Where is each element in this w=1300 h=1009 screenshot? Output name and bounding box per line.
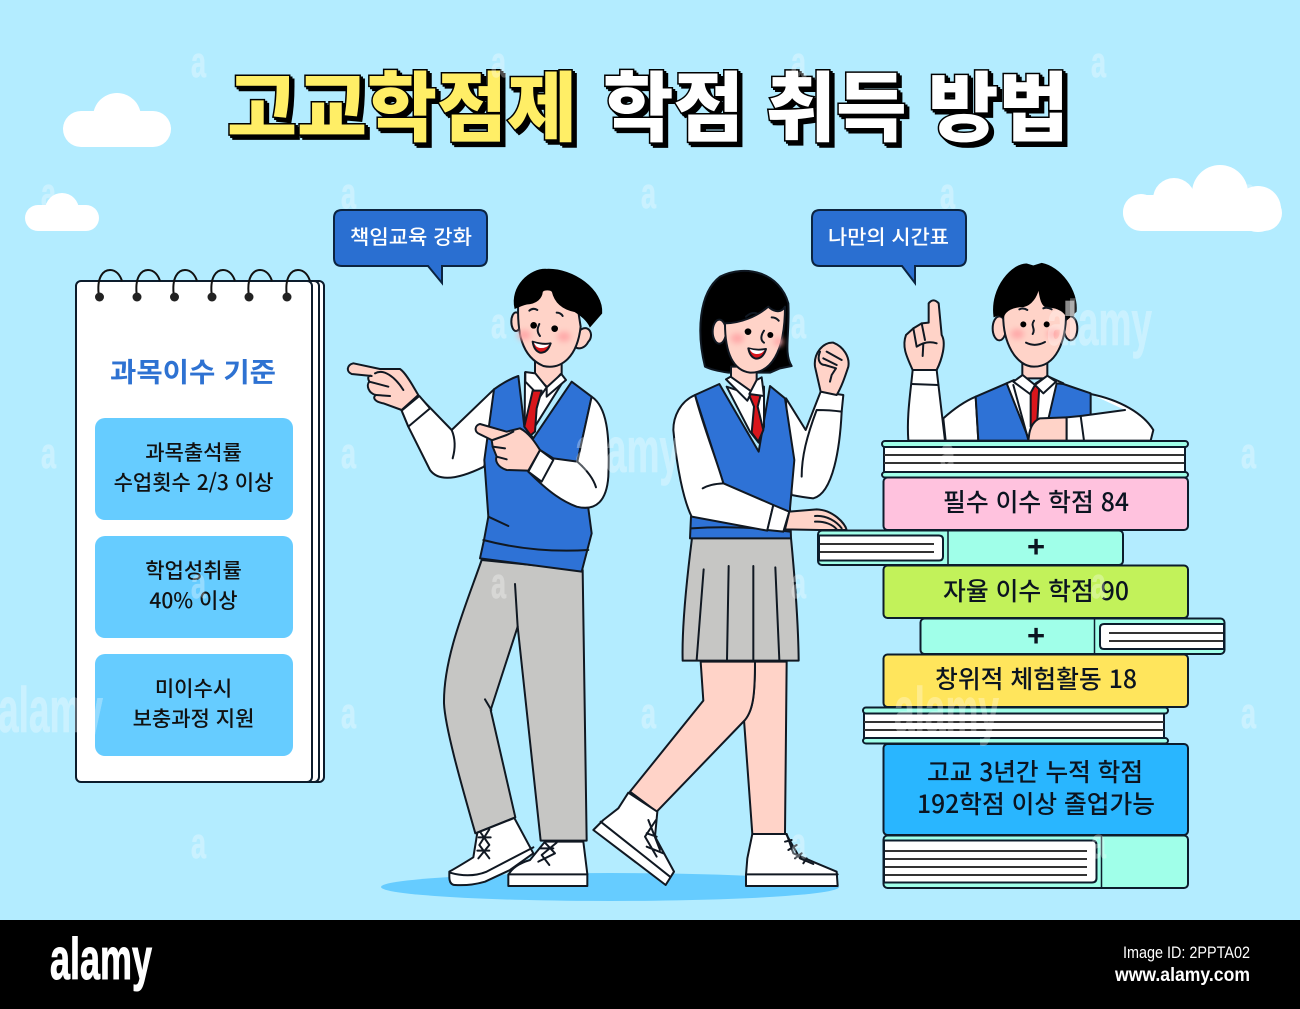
watermarks: a: [940, 429, 955, 478]
criteria box 1: 과목출석률: [145, 437, 242, 467]
criteria box 1: 수업횟수 2/3 이상: [114, 467, 273, 497]
watermarks: a: [491, 819, 506, 868]
girl legs and skirt: [593, 538, 838, 886]
watermarks: a: [41, 429, 56, 478]
watermarks: a: [641, 689, 656, 738]
watermarks: a: [491, 299, 506, 348]
footer logo: alamy: [50, 927, 152, 992]
title remainder: 학점 취득 방법: [603, 47, 1069, 157]
watermarks: a: [341, 169, 356, 218]
cloud: small left: [25, 193, 99, 231]
watermarks: a: [491, 559, 506, 608]
book: required credits: 필수 이수 학점 84: [943, 483, 1129, 519]
watermarks: a: [341, 689, 356, 738]
watermarks: a: [641, 169, 656, 218]
cloud: right: [1123, 165, 1282, 232]
watermarks: a: [191, 819, 206, 868]
ground shadow: [381, 873, 839, 901]
book: creative activities: 창위적 체험활동 18: [935, 660, 1137, 696]
panel: notebook: [76, 270, 324, 782]
watermarks: alamy: [894, 674, 999, 746]
watermarks: a: [791, 819, 806, 868]
character: girl: [593, 271, 849, 886]
book: graduation requirement: 192학점 이상 졸업가능: [917, 785, 1155, 821]
notebook heading: 과목이수 기준: [110, 351, 276, 390]
watermarks: a: [1241, 169, 1256, 218]
notebook spiral rings: [95, 270, 310, 302]
watermarks: a: [191, 299, 206, 348]
girl torso and head: [673, 271, 849, 538]
watermarks: a: [1241, 689, 1256, 738]
speech bubble: right: [812, 210, 966, 283]
book: creative activities: [884, 654, 1188, 707]
watermarks: a: [341, 429, 356, 478]
criteria box 1: [95, 418, 293, 520]
book: elective credits: [884, 566, 1188, 618]
criteria box 2: 학업성취률: [145, 555, 242, 585]
speech bubble: right: 나만의 시간표: [828, 221, 949, 250]
watermarks: a: [1091, 38, 1106, 87]
book: top closed: [882, 441, 1188, 478]
character: boy pointing: [348, 269, 609, 886]
watermarks: alamy: [0, 674, 103, 746]
watermarks: a: [791, 559, 806, 608]
criteria box 3: [95, 654, 293, 756]
title: [227, 47, 1069, 157]
plus sign: +: [1027, 529, 1045, 564]
speech bubble: left: 책임교육 강화: [350, 221, 472, 250]
boy legs: [444, 560, 587, 886]
watermarks: a: [41, 169, 56, 218]
book: closed thin: [863, 708, 1168, 744]
speech bubble: left: [334, 210, 487, 283]
watermarks: a: [1091, 819, 1106, 868]
title highlight: 고교학점제: [227, 47, 577, 157]
book: required credits: [884, 478, 1188, 530]
watermarks: a: [791, 299, 806, 348]
watermarks: a: [940, 169, 955, 218]
criteria box 3: 보충과정 지원: [133, 703, 254, 733]
plus sign: +: [1027, 618, 1045, 653]
watermarks: a: [791, 38, 806, 87]
book: plus two: [920, 618, 1224, 654]
footer url: www.alamy.com: [1114, 965, 1250, 986]
character: boy behind books: [904, 263, 1153, 441]
book stack: [818, 441, 1224, 888]
criteria box 2: [95, 536, 293, 638]
book: bottom: [884, 836, 1188, 888]
watermarks: alamy: [575, 414, 680, 486]
book: elective credits: 자율 이수 학점 90: [943, 572, 1129, 608]
watermarks: a: [1091, 559, 1106, 608]
criteria box 2: 40% 이상: [149, 585, 238, 615]
book: plus one: [818, 529, 1123, 565]
watermarks: a: [191, 38, 206, 87]
watermarks: a: [1241, 429, 1256, 478]
watermarks: alamy: [1047, 287, 1152, 359]
footer band: [0, 920, 1300, 1009]
cloud: top left: [63, 93, 171, 147]
boy torso and head: [348, 269, 609, 572]
watermarks: [0, 38, 1256, 868]
watermark patch on hair: [1065, 301, 1074, 316]
book: graduation requirement: [884, 744, 1188, 835]
watermarks: a: [191, 559, 206, 608]
book: graduation requirement: 고교 3년간 누적 학점: [927, 753, 1143, 789]
image id: Image ID: 2PPTA02: [1123, 943, 1250, 962]
criteria box 3: 미이수시: [155, 673, 232, 703]
watermarks: a: [491, 38, 506, 87]
